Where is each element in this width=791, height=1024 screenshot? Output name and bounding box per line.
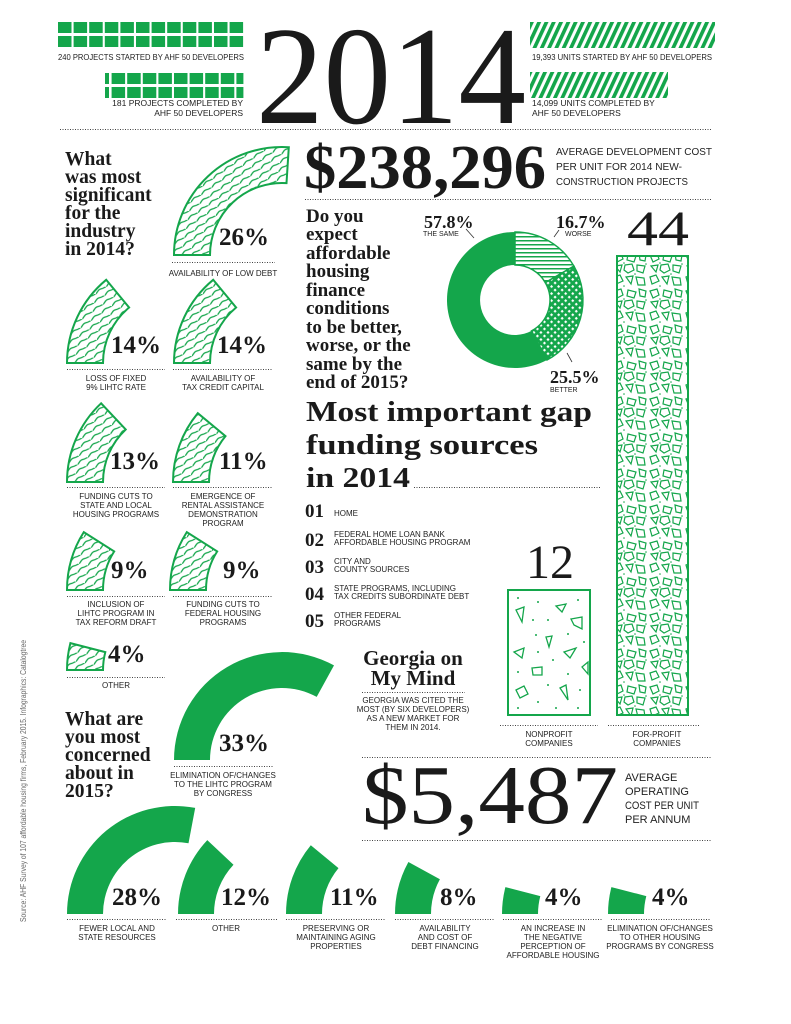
donut chart: 57.8% <box>424 212 474 232</box>
heading: what was most significant: was most <box>65 167 142 188</box>
heading: what are you most concerned: you most <box>65 727 141 748</box>
panel: 2015 concern arcs: BY CONGRESS <box>194 789 252 798</box>
panel: 2014 significance arcs: TAX REFORM DRAFT <box>76 618 156 627</box>
heading: what was most significant: in 2014? <box>65 239 135 260</box>
heading: what was most significant: for the <box>65 203 121 224</box>
heading: finance conditions question: Do you <box>306 206 364 227</box>
callout: Georgia on my mind: THEM IN 2014. <box>385 723 441 732</box>
heading: finance conditions question: conditions <box>306 298 389 319</box>
header: units completed label: AHF 50 DEVELOPERS <box>532 108 621 118</box>
panel: 2014 significance arcs <box>67 147 289 690</box>
donut chart: 25.5% <box>550 367 600 387</box>
header: units started stripes <box>530 22 715 48</box>
panel: 2014 significance arcs: EMERGENCE OF <box>191 492 256 501</box>
panel: 2014 significance arcs: TAX CREDIT CAPITAL <box>182 383 264 392</box>
callout: Georgia on my mind: My Mind <box>371 666 456 690</box>
list: gap funding sources: PROGRAMS <box>334 619 381 628</box>
heading: finance conditions question: end of 2015? <box>306 372 408 393</box>
panel: 2015 concern arcs: PROPERTIES <box>310 942 362 951</box>
list: gap funding sources: OTHER FEDERAL <box>334 611 402 620</box>
list: gap funding sources: TAX CREDITS SUBORDINATE DEBT <box>334 592 469 601</box>
stat: development cost <box>304 134 713 202</box>
donut chart: THE SAME <box>423 231 459 238</box>
heading: gap funding sources: funding sources <box>306 429 538 461</box>
panel: 2014 significance arcs: AVAILABILITY OF LOW DEBT <box>169 269 277 278</box>
panel: 2015 concern arcs: AVAILABILITY <box>419 924 471 933</box>
list: gap funding sources: AFFORDABLE HOUSING PROGRAM <box>334 538 471 547</box>
panel: 2015 concern arcs: OTHER <box>212 924 240 933</box>
panel: 2015 concern arcs: PRESERVING OR <box>303 924 369 933</box>
bar chart: nonprofit companies: 12 <box>526 536 574 589</box>
panel: 2014 significance arcs: FUNDING CUTS TO <box>186 600 260 609</box>
stat: operating cost <box>362 749 699 842</box>
bar chart: nonprofit companies: NONPROFIT <box>525 730 573 739</box>
panel: 2015 concern arcs: ELIMINATION OF/CHANGES <box>170 771 276 780</box>
heading: what was most significant: significant <box>65 185 152 206</box>
panel: 2014 significance arcs: FUNDING CUTS TO <box>79 492 153 501</box>
header: projects completed label: AHF 50 DEVELOPERS <box>154 108 243 118</box>
heading: finance conditions question: worse, or the <box>306 335 411 356</box>
panel: 2015 concern arcs: ELIMINATION OF/CHANGES <box>607 924 713 933</box>
stat: development cost: CONSTRUCTION PROJECTS <box>556 176 688 188</box>
panel: 2014 significance arcs: 11% <box>219 448 268 475</box>
heading: finance conditions question: same by the <box>306 354 402 375</box>
list: gap funding sources: 03 <box>305 557 324 578</box>
heading: finance conditions question: expect <box>306 224 358 245</box>
source note: Source: AHF Survey of 107 affordable housing firms, February 2015. Infographics: Catalogtree <box>19 640 28 922</box>
donut chart <box>423 212 606 394</box>
heading: gap funding sources: Most important gap <box>306 396 592 428</box>
panel: 2015 concern arcs: AND COST OF <box>418 933 472 942</box>
panel: 2014 significance arcs: 9% LIHTC RATE <box>86 383 146 392</box>
callout: Georgia on my mind: AS A NEW MARKET FOR <box>367 714 460 723</box>
header: projects started label: 240 PROJECTS STARTED BY AHF 50 DEVELOPERS <box>58 52 244 62</box>
panel: 2014 significance arcs: INCLUSION OF <box>88 600 145 609</box>
panel: 2014 significance arcs: DEMONSTRATION <box>188 510 258 519</box>
heading: what are you most concerned: What are <box>65 709 144 730</box>
stat: operating cost: COST PER UNIT <box>625 800 699 812</box>
panel: 2014 significance arcs: HOUSING PROGRAMS <box>73 510 159 519</box>
donut chart: WORSE <box>565 231 592 238</box>
list: gap funding sources: 01 <box>305 501 324 522</box>
bar chart: nonprofit companies <box>508 536 590 748</box>
panel: 2015 concern arcs: 11% <box>330 884 379 911</box>
panel: 2014 significance arcs: 13% <box>110 448 160 475</box>
list: gap funding sources: CITY AND <box>334 557 371 566</box>
callout: Georgia on my mind: GEORGIA WAS CITED THE <box>362 696 464 705</box>
donut chart: BETTER <box>550 387 578 394</box>
panel: 2014 significance arcs: FEDERAL HOUSING <box>185 609 261 618</box>
panel: 2014 significance arcs: OTHER <box>102 681 130 690</box>
panel: 2015 concern arcs: 4% <box>545 884 582 911</box>
heading: finance conditions question: affordable <box>306 243 390 264</box>
donut chart: 16.7% <box>556 212 606 232</box>
bar chart: nonprofit companies: COMPANIES <box>525 739 573 748</box>
panel: 2014 significance arcs: 4% <box>108 641 146 668</box>
list: gap funding sources: 04 <box>305 584 324 605</box>
panel: 2014 significance arcs: 14% <box>111 332 161 359</box>
heading: finance conditions question: housing <box>306 261 370 282</box>
callout: Georgia on my mind <box>357 646 470 732</box>
stat: development cost: AVERAGE DEVELOPMENT COST <box>556 146 713 158</box>
panel: 2014 significance arcs: AVAILABILITY OF <box>191 374 255 383</box>
header: units completed stripes <box>530 72 668 98</box>
stat: development cost: $238,296 <box>304 134 546 202</box>
panel: 2015 concern arcs <box>67 652 714 960</box>
panel: 2015 concern arcs: 28% <box>112 884 162 911</box>
list: gap funding sources <box>305 501 471 632</box>
list: gap funding sources: FEDERAL HOME LOAN BANK <box>334 530 446 539</box>
panel: 2014 significance arcs: 9% <box>111 557 148 584</box>
heading: finance conditions question: finance <box>306 280 365 301</box>
panel: 2015 concern arcs: AFFORDABLE HOUSING <box>507 951 599 960</box>
list: gap funding sources: STATE PROGRAMS, INCLUDING <box>334 584 456 593</box>
panel: 2014 significance arcs: LIHTC PROGRAM IN <box>78 609 155 618</box>
bar chart: for-profit companies <box>617 200 689 748</box>
title: 2014: 2014 <box>256 0 526 154</box>
header: projects completed label: 181 PROJECTS COMPLETED BY <box>112 98 243 108</box>
header: projects started blocks <box>58 22 243 47</box>
header: units completed label: 14,099 UNITS COMPLETED BY <box>532 98 655 108</box>
heading: what was most significant: industry <box>65 221 136 242</box>
panel: 2015 concern arcs: 4% <box>652 884 690 911</box>
panel: 2015 concern arcs: FEWER LOCAL AND <box>79 924 155 933</box>
callout: Georgia on my mind: MOST (BY SIX DEVELOPERS) <box>357 705 470 714</box>
heading: what was most significant: What <box>65 149 112 170</box>
panel: 2015 concern arcs: AN INCREASE IN <box>521 924 585 933</box>
panel: 2015 concern arcs: THE NEGATIVE <box>524 933 582 942</box>
list: gap funding sources: 05 <box>305 611 324 632</box>
heading: finance conditions question: to be better, <box>306 317 402 338</box>
panel: 2015 concern arcs: PERCEPTION OF <box>520 942 586 951</box>
panel: 2015 concern arcs: STATE RESOURCES <box>78 933 156 942</box>
panel: 2014 significance arcs: LOSS OF FIXED <box>86 374 146 383</box>
bar chart: for-profit companies: FOR-PROFIT <box>633 730 682 739</box>
list: gap funding sources: COUNTY SOURCES <box>334 565 409 574</box>
panel: 2015 concern arcs: TO OTHER HOUSING <box>620 933 700 942</box>
bar chart: for-profit companies: 44 <box>627 200 689 256</box>
panel: 2015 concern arcs: 12% <box>221 884 271 911</box>
panel: 2015 concern arcs: 8% <box>440 884 478 911</box>
panel: 2014 significance arcs: 26% <box>219 224 269 251</box>
bar chart: for-profit companies: COMPANIES <box>633 739 681 748</box>
panel: 2014 significance arcs: 9% <box>223 557 260 584</box>
panel: 2014 significance arcs: RENTAL ASSISTANCE <box>182 501 264 510</box>
panel: 2014 significance arcs: STATE AND LOCAL <box>80 501 152 510</box>
heading: what are you most concerned: about in <box>65 763 134 784</box>
callout: Georgia on my mind: Georgia on <box>363 646 463 670</box>
panel: 2015 concern arcs: DEBT FINANCING <box>411 942 479 951</box>
stat: development cost: PER UNIT FOR 2014 NEW- <box>556 161 682 173</box>
header: projects completed blocks <box>105 73 243 98</box>
panel: 2014 significance arcs: PROGRAMS <box>200 618 246 627</box>
heading: gap funding sources: in 2014 <box>306 462 410 494</box>
stat: operating cost: $5,487 <box>362 749 618 842</box>
panel: 2015 concern arcs: 33% <box>219 730 269 757</box>
panel: 2014 significance arcs: PROGRAM <box>202 519 244 528</box>
stat: operating cost: OPERATING <box>625 786 689 798</box>
panel: 2014 significance arcs: 14% <box>217 332 267 359</box>
panel: 2015 concern arcs: MAINTAINING AGING <box>296 933 376 942</box>
stat: operating cost: AVERAGE <box>625 772 677 784</box>
list: gap funding sources: HOME <box>334 509 358 518</box>
stat: operating cost: PER ANNUM <box>625 814 690 826</box>
header: units started label: 19,393 UNITS STARTED BY AHF 50 DEVELOPERS <box>532 52 712 62</box>
panel: 2015 concern arcs: PROGRAMS BY CONGRESS <box>606 942 714 951</box>
heading: what are you most concerned: 2015? <box>65 781 114 802</box>
heading: what are you most concerned: concerned <box>65 745 151 766</box>
panel: 2015 concern arcs: TO THE LIHTC PROGRAM <box>174 780 272 789</box>
list: gap funding sources: 02 <box>305 530 324 551</box>
